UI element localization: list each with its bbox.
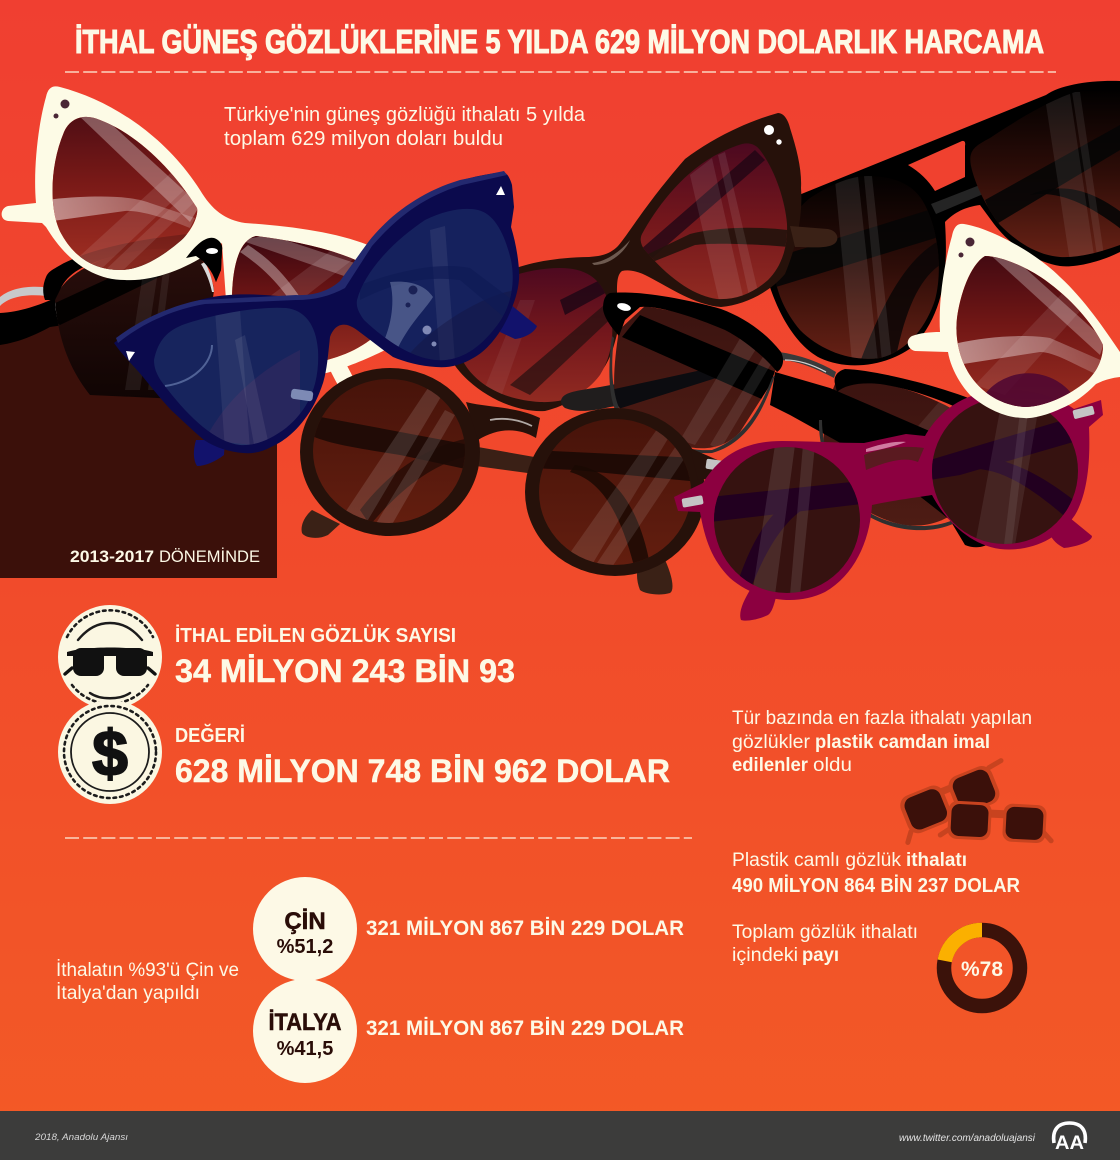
text: share label: payı (802, 945, 839, 966)
text: country share (56, 960, 239, 1004)
value: Italy: 321 MİLYON 867 BİN 229 DOLAR (366, 1017, 684, 1040)
text: plastic imports: 490 MİLYON 864 BİN 237 DOLAR (732, 874, 1021, 897)
text: type summary: gözlükler (732, 732, 811, 753)
stat: value: DEĞERİ (175, 723, 245, 747)
donut chart: 78 percent: %78 (961, 958, 1003, 981)
country badge: Italy: %41,5 (277, 1038, 333, 1060)
text: type summary: edilenler (732, 755, 809, 776)
text: plastic imports: Plastik camlı gözlük (732, 850, 901, 871)
text: share label: Toplam gözlük ithalatı (732, 922, 918, 943)
sunglasses: magenta round (674, 390, 1103, 621)
sunglasses: dark round tortoise (300, 368, 728, 594)
country badge: China (253, 877, 357, 981)
sunglasses: black clubmaster left (0, 234, 222, 405)
sunglasses: brown cat-eye centre (446, 113, 837, 411)
intro text: Türkiye'nin güneş gözlüğü ithalatı 5 yılda (224, 104, 586, 126)
country badge: Italy: İTALYA (268, 1009, 342, 1036)
text: type summary: plastik camdan imal (815, 732, 990, 753)
footer credit: 2018, Anadolu Ajansı (34, 1132, 128, 1143)
country badge: China: ÇİN (284, 908, 326, 935)
period label: DÖNEMİNDE (159, 547, 260, 566)
footer link: www.twitter.com/anadoluajansi (899, 1133, 1036, 1144)
sunglasses: black aviator (760, 81, 1120, 365)
donut chart: 78 percent (944, 930, 1020, 1006)
tilted pair (891, 758, 1016, 842)
text: type summary: oldu (813, 755, 852, 776)
country badge: Italy (253, 979, 357, 1083)
period label: 2013-2017 (70, 547, 154, 566)
icon: plastic sunglasses pair (891, 758, 1053, 844)
intro text (224, 104, 586, 150)
stat: imported count: İTHAL EDİLEN GÖZLÜK SAYISI (175, 624, 456, 647)
text: plastic imports: ithalatı (906, 850, 967, 871)
clubmaster hinge (186, 238, 222, 282)
text: type summary (732, 708, 1032, 776)
stat: value (175, 723, 670, 789)
text: share label: içindeki (732, 945, 798, 966)
sunglasses: white cat-eye left (2, 86, 384, 384)
icon: dollar badge (58, 700, 162, 804)
sunglasses: black clubmaster centre (561, 292, 1020, 547)
logo: Anadolu Ajansı (1054, 1123, 1085, 1154)
value: China: 321 MİLYON 867 BİN 229 DOLAR (366, 917, 684, 940)
text: country share: İtalya'dan yapıldı (56, 983, 200, 1004)
level pair (940, 800, 1053, 844)
stat: imported count (175, 624, 515, 689)
temple tip (328, 362, 361, 403)
footer (0, 1111, 1120, 1160)
intro text: toplam 629 milyon doları buldu (224, 128, 503, 150)
sunglasses: white cat-eye right (908, 224, 1120, 420)
country badge: China: %51,2 (277, 936, 333, 958)
text: plastic imports (732, 850, 1021, 897)
icon: sunglasses badge (58, 605, 162, 709)
text: share label (732, 922, 918, 966)
period label (70, 547, 260, 566)
text: type summary: Tür bazında en fazla ithalatı yapılan (732, 708, 1032, 729)
stat: value: 628 MİLYON 748 BİN 962 DOLAR (175, 753, 670, 789)
temple tip (790, 226, 837, 247)
icon: dollar badge: $ (92, 717, 128, 789)
logo: Anadolu Ajansı: AA (1055, 1133, 1084, 1154)
text: country share: İthalatın %93'ü Çin ve (56, 960, 239, 981)
sunglasses: navy cat-eye front (114, 171, 537, 466)
dark period panel (0, 325, 277, 578)
stat: imported count: 34 MİLYON 243 BİN 93 (175, 653, 515, 689)
